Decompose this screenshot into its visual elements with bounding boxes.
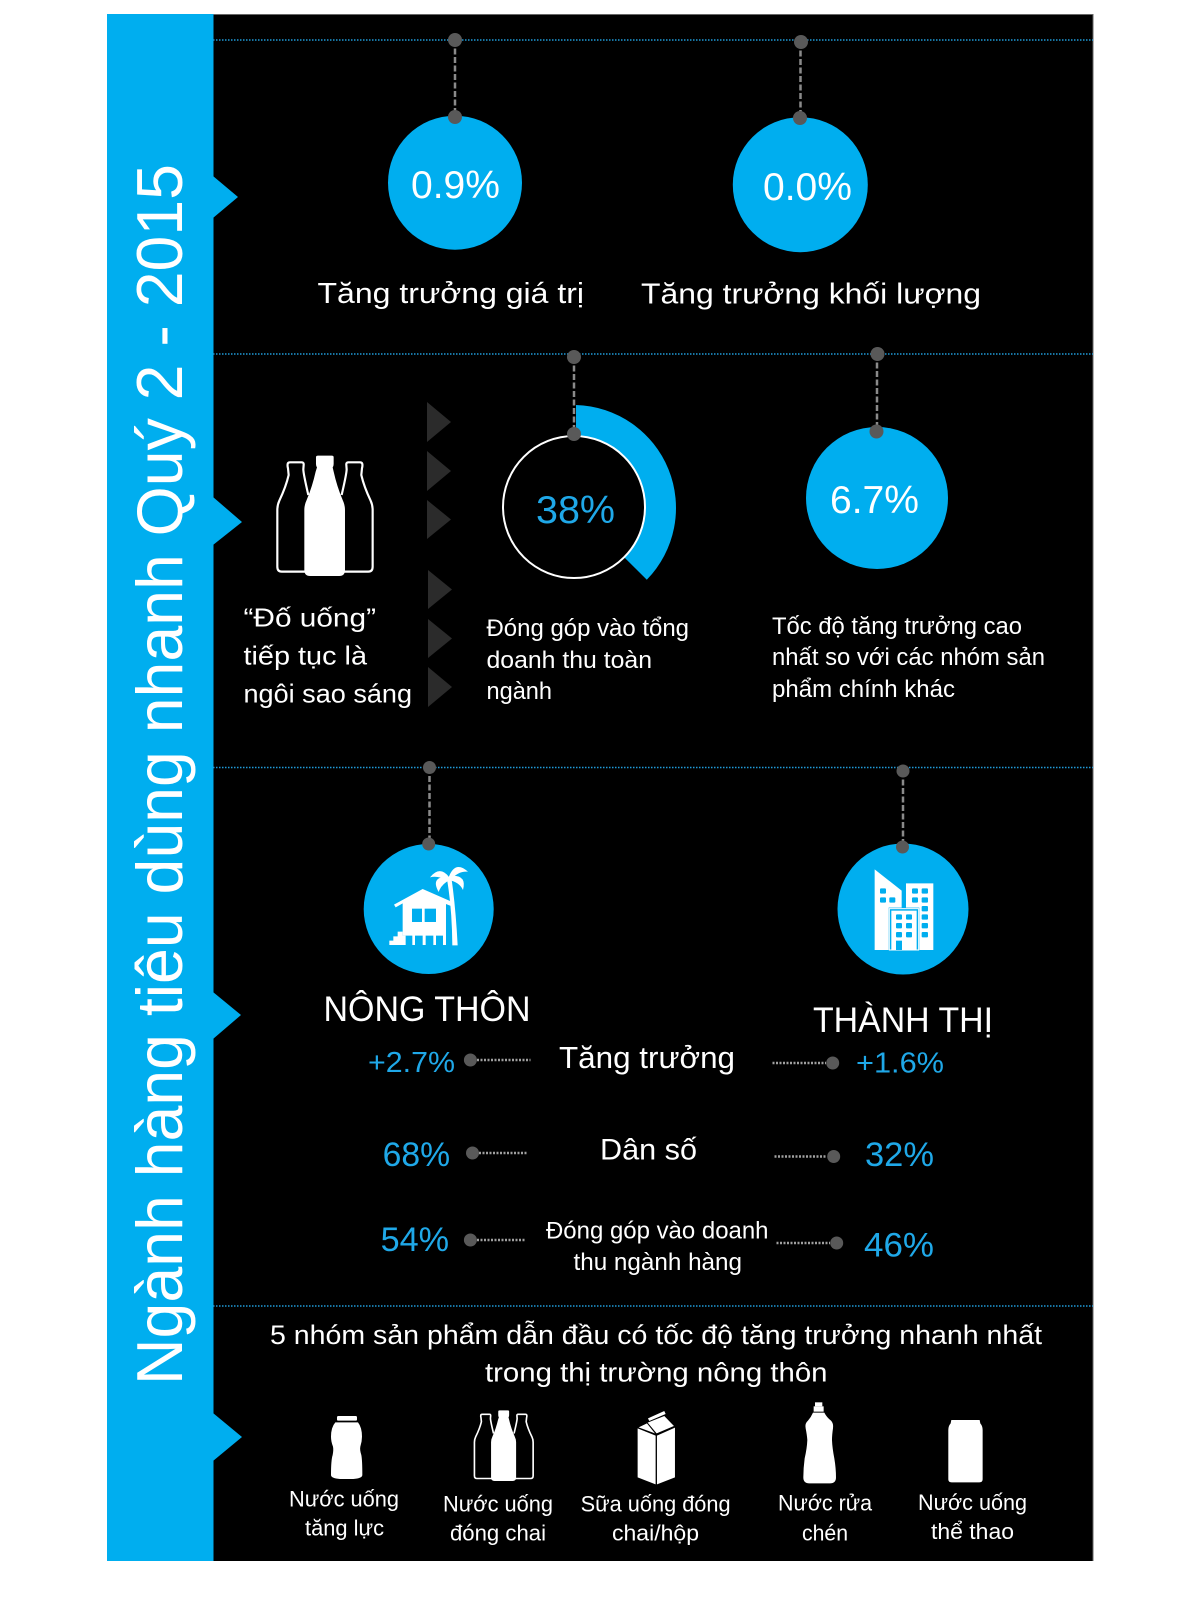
text: beverages headline (244, 602, 412, 708)
row: revenue share: Đóng góp vào doanh (546, 1218, 768, 1244)
stat: value growth: 0.9% (411, 164, 500, 207)
category labels (289, 1487, 1027, 1546)
panel: rural vs urban (324, 761, 993, 1276)
stat: 6.7% (806, 347, 948, 569)
category labels: Nước uống (443, 1492, 553, 1517)
row: growth: +1.6% (856, 1048, 944, 1080)
category labels: tăng lực (305, 1516, 384, 1541)
chart: 38% donut: 38% (536, 489, 615, 532)
chevron arrows (427, 402, 452, 707)
text: share of revenue: doanh thu toàn (486, 647, 652, 674)
text: share of revenue: Đóng góp vào tổng (486, 615, 689, 642)
icon: energy drink bottle (331, 1416, 362, 1479)
stat: volume growth: Tăng trưởng khối lượng (641, 278, 981, 310)
icon: three bottles (277, 456, 373, 576)
blue sidebar with arrow notches (107, 14, 242, 1561)
row: population (383, 1134, 934, 1174)
text: share of revenue (486, 615, 689, 705)
text: highest growth: phẩm chính khác (772, 676, 955, 703)
category labels: Nước uống (289, 1487, 399, 1512)
stat: volume growth (641, 35, 981, 310)
row: growth: Tăng trưởng (559, 1040, 735, 1075)
text: highest growth: Tốc độ tăng trưởng cao (772, 613, 1022, 640)
text: beverages headline: ngôi sao sáng (244, 678, 412, 708)
icon: city buildings (838, 764, 968, 974)
text: beverages headline: tiếp tục là (244, 640, 368, 670)
chart: 38% donut (503, 350, 676, 580)
icon: bottled water (474, 1410, 533, 1481)
icon: sports drink can (948, 1420, 983, 1482)
row: growth: +2.7% (368, 1047, 455, 1079)
text: highest growth: nhất so với các nhóm sản (772, 644, 1045, 671)
stat: value growth: Tăng trưởng giá trị (318, 278, 584, 310)
category labels: đóng chai (450, 1521, 546, 1546)
row: growth (368, 1040, 944, 1080)
row: revenue share (381, 1218, 934, 1276)
row: revenue share: 46% (864, 1226, 934, 1264)
text: share of revenue: ngành (486, 678, 552, 705)
row: revenue share: 54% (381, 1221, 449, 1259)
category labels: Nước uống (918, 1490, 1027, 1515)
category labels: Sữa uống đóng (581, 1492, 731, 1517)
black background panel (213, 14, 1093, 1561)
icon: milk carton (638, 1411, 675, 1484)
text: beverages headline: “Đố uống” (244, 602, 376, 632)
icon: rural house (364, 761, 494, 974)
row: population: 32% (865, 1136, 934, 1174)
category labels: Nước rửa (778, 1491, 873, 1516)
heading: rural: NÔNG THÔN (324, 990, 530, 1029)
category labels: thể thao (931, 1519, 1014, 1544)
category labels: chén (802, 1521, 848, 1546)
heading: top five: trong thị trường nông thôn (485, 1358, 828, 1388)
panel: beverages (244, 347, 1045, 708)
heading: urban: THÀNH THỊ (813, 1001, 993, 1040)
stat: value growth (318, 33, 584, 310)
stat: 6.7%: 6.7% (830, 479, 919, 522)
icon: dish soap bottle (803, 1402, 836, 1483)
title: Ngành hàng tiêu dùng nhanh Quý 2 - 2015 (123, 164, 196, 1385)
row: population: 68% (383, 1136, 450, 1174)
category labels: chai/hộp (612, 1521, 699, 1546)
text: highest growth (772, 613, 1045, 703)
heading: top five (270, 1319, 1043, 1388)
heading: top five: 5 nhóm sản phẩm dẫn đầu có tốc độ tăng trưởng nhanh nhất (270, 1319, 1043, 1350)
stat: volume growth: 0.0% (763, 166, 852, 209)
row: population: Dân số (600, 1134, 697, 1166)
panel: top five categories (270, 1319, 1043, 1546)
row: revenue share: thu ngành hàng (574, 1249, 742, 1276)
panel: growth (318, 33, 981, 310)
